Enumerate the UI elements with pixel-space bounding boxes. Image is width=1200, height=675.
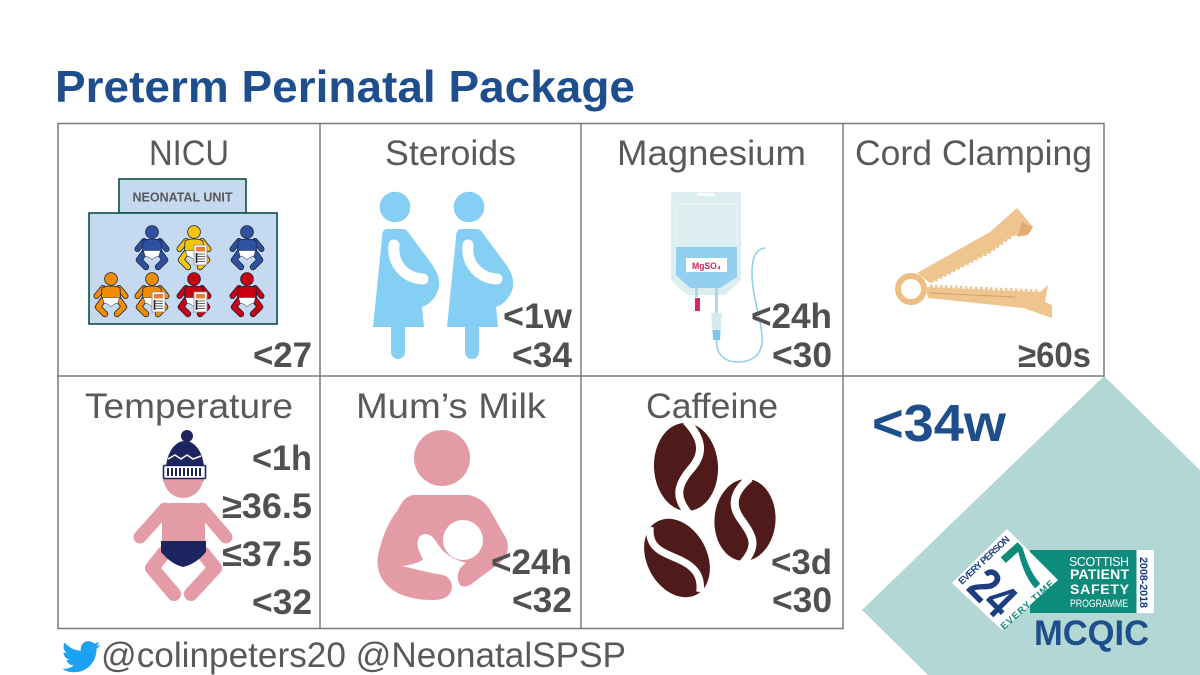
values: <30	[772, 581, 832, 620]
panel: Caffeine	[631, 387, 832, 620]
value: ≥60s	[1018, 336, 1091, 375]
heading: Magnesium: Magnesium	[617, 134, 806, 173]
icon: baby in hat	[140, 430, 226, 594]
icon: breastfeeding mother	[378, 430, 508, 600]
icon: IV bag: MgSO₄	[692, 261, 721, 272]
panel: NICU	[89, 134, 312, 375]
icon: coffee beans	[631, 421, 778, 609]
icon: umbilical clamp	[898, 208, 1052, 318]
values	[222, 439, 312, 622]
values: ≥36.5	[222, 487, 312, 526]
logo: Scottish Patient Safety Programme: 24	[957, 557, 1028, 628]
logo: Scottish Patient Safety Programme: SCOTTISH	[1069, 555, 1129, 569]
background triangle	[862, 376, 1200, 675]
icon: IV bag	[671, 192, 765, 362]
values: <24h	[491, 543, 572, 582]
heading: Mum's Milk: Mum’s Milk	[356, 387, 547, 426]
heading: Cord Clamping: Cord Clamping	[855, 134, 1092, 173]
values: <1w	[503, 297, 573, 336]
logo: Scottish Patient Safety Programme: EVERY TIME	[999, 579, 1057, 632]
heading: Temperature: Temperature	[85, 387, 293, 426]
icon: pregnant women	[373, 192, 513, 359]
values	[491, 543, 572, 620]
heading: NICU: NICU	[149, 134, 229, 173]
logo: Scottish Patient Safety Programme: PROGRAMME	[1070, 598, 1128, 610]
values: <24h	[751, 297, 832, 336]
panel: Cord Clamping	[855, 134, 1092, 375]
icon: neonatal unit: NEONATAL UNIT	[132, 190, 233, 204]
icon: twitter bird	[62, 641, 100, 672]
callout: <34w: <34w	[872, 395, 1007, 453]
values: <30	[772, 336, 832, 375]
values	[751, 297, 832, 375]
logo: Scottish Patient Safety Programme: 7	[990, 530, 1060, 604]
panel: Magnesium	[617, 134, 832, 375]
values	[771, 543, 832, 620]
label: MCQIC: MCQIC	[1034, 614, 1149, 653]
footer handles: @colinpeters20 @NeonatalSPSP	[101, 636, 626, 675]
logo: Scottish Patient Safety Programme: PATIENT	[1070, 566, 1129, 582]
logo: Scottish Patient Safety Programme: EVERY PERSON	[957, 534, 1012, 587]
heading: Caffeine: Caffeine	[646, 387, 778, 426]
value: <27	[253, 336, 312, 375]
values: <3d	[771, 543, 832, 582]
panel: Temperature	[85, 387, 312, 622]
heading: Steroids: Steroids	[385, 134, 516, 173]
values: <1h	[252, 439, 312, 478]
values: ≤37.5	[222, 535, 312, 574]
panel: Mum's Milk	[356, 387, 572, 620]
icon: neonatal unit	[89, 179, 277, 324]
values: <32	[252, 583, 312, 622]
title: Preterm Perinatal Package	[55, 63, 635, 112]
logo: Scottish Patient Safety Programme: 2008-2018	[1137, 557, 1149, 608]
values: <32	[512, 581, 572, 620]
logo: Scottish Patient Safety Programme: SAFETY	[1070, 581, 1130, 597]
logo: Scottish Patient Safety Programme	[952, 529, 1154, 632]
values	[503, 297, 573, 375]
panel: Steroids	[373, 134, 573, 375]
table grid	[58, 124, 1104, 628]
values: <34	[512, 336, 573, 375]
